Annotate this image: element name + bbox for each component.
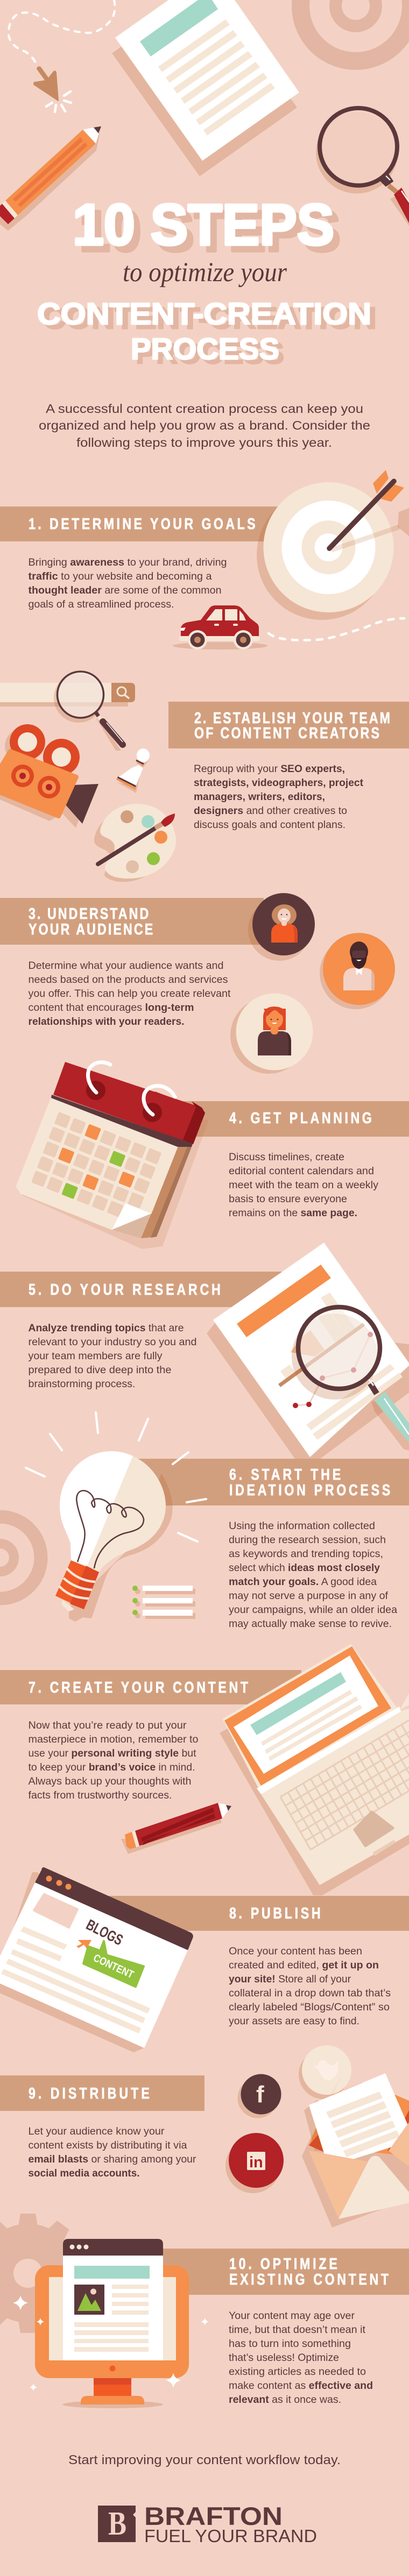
heading band 3: YOUR AUDIENCE (29, 920, 153, 938)
icon: pencil (0, 126, 101, 231)
icon: research document with magnifier (207, 1243, 409, 1459)
icon: film camera (0, 724, 98, 828)
heading band 9 (0, 2075, 204, 2111)
icon: logo mark: B (108, 2506, 126, 2542)
text block 8: your site! Store all of your (229, 1974, 351, 1985)
icon: linkedin badge: in (249, 2154, 263, 2171)
icon: laptop (220, 1644, 409, 1895)
icon: gear (0, 2214, 88, 2333)
icon: facebook badge: f (256, 2081, 264, 2108)
text block 4: Discuss timelines, create (229, 1152, 344, 1163)
text block 7 (28, 1720, 198, 1801)
panel: step 5 (0, 1243, 409, 1459)
text block 2: strategists, videographers, project (194, 777, 364, 789)
text block 4 (229, 1152, 379, 1219)
icon: red pencil (121, 1803, 231, 1854)
text block 3: Determine what your audience wants and (28, 960, 224, 972)
text block 2: designers and other creatives to (194, 805, 347, 817)
text block 1: thought leader are some of the common (28, 585, 222, 596)
icon: linkedin badge (225, 2133, 284, 2193)
icon: audience bearded man (320, 933, 395, 1009)
heading band 7: 7. CREATE YOUR CONTENT (29, 1678, 248, 1696)
text block 3 (28, 960, 231, 1027)
icon: magnifier (54, 672, 123, 751)
text block 6: select which ideas most closely (229, 1562, 380, 1574)
heading band 8 (102, 1896, 409, 1931)
text block 2: managers, writers, editors, (194, 791, 325, 803)
text block 8: your assets are easy to find. (229, 2016, 359, 2027)
text block 6: during the research session, such (229, 1535, 386, 1546)
panel: step 1 (0, 470, 409, 650)
text block 1: traffic to your website and becoming a (28, 571, 212, 582)
tagline: FUEL YOUR BRAND (144, 2526, 317, 2546)
text block 8: Once your content has been (229, 1946, 362, 1957)
text block 6: as keywords and trending topics, (229, 1549, 383, 1560)
text block 7: Always back up your thoughts with (28, 1776, 192, 1787)
heading band 9: 9. DISTRIBUTE (29, 2084, 150, 2102)
icon: dashed cursor trail (9, 0, 115, 63)
heading band 6: IDEATION PROCESS (229, 1481, 390, 1499)
heading: 10 steps: 10 STEPS (73, 192, 334, 257)
text block 3: you offer. This can help you create relevant (28, 988, 231, 1000)
text block 10: relevant as it once was. (229, 2394, 341, 2406)
icon: orange cursor (76, 1940, 91, 1949)
intro text: A successful content creation process can keep you (46, 402, 363, 416)
text block 9: Let your audience know your (28, 2126, 165, 2137)
text block 4: remains on the same page. (229, 1208, 357, 1219)
heading band 7 (0, 1670, 301, 1704)
text block 2 (194, 763, 364, 831)
text block 10: existing articles as needed to (229, 2366, 366, 2378)
intro text (39, 402, 370, 449)
panel: step 8 (0, 1867, 409, 2052)
heading band 1 (0, 506, 280, 541)
heading band 6 (135, 1459, 409, 1505)
heading band 10 (161, 2249, 409, 2295)
text block 4: editorial content calendars and (229, 1166, 374, 1177)
icon: target with arrow (257, 470, 409, 620)
icon: chess pawn (116, 748, 150, 793)
icon: click marks (46, 91, 71, 112)
icon: light rays (26, 1412, 206, 1542)
text block 6: match your goals. A good idea (229, 1576, 377, 1588)
heading band 3: 3. UNDERSTAND (29, 904, 149, 923)
heading band 6: 6. START THE (229, 1465, 341, 1483)
heading band 3 (0, 898, 264, 945)
intro text: following steps to improve yours this year. (76, 436, 332, 449)
icon: search bar (0, 683, 135, 707)
text block 10 (229, 2310, 373, 2406)
panel: step 10 (0, 2214, 409, 2408)
heading band 4: 4. GET PLANNING (229, 1109, 372, 1127)
icon: audience woman with wavy hair (248, 893, 315, 961)
heading band 8: 8. PUBLISH (229, 1904, 321, 1922)
text block 5: brainstorming process. (28, 1379, 136, 1390)
icon: check list (132, 1586, 195, 1619)
icon: desktop monitor (35, 2239, 189, 2408)
icon: content tab: CONTENT (91, 1952, 136, 1981)
text block 1: Bringing awareness to your brand, driving (28, 557, 227, 568)
text block 8: collateral in a drop down tab that’s (229, 1988, 391, 1999)
text block 2: discuss goals and content plans. (194, 819, 345, 831)
text block 9: content exists by distributing it via (28, 2140, 187, 2151)
heading band 5 (0, 1272, 285, 1307)
text block 9 (28, 2126, 196, 2179)
text block 6: may not serve a purpose in any of (229, 1590, 389, 1602)
panel: step 9 (0, 2045, 409, 2228)
icon: light bulb (55, 1451, 173, 1622)
icon: dashed road (269, 618, 404, 640)
text block 1 (28, 557, 227, 610)
icon: envelope with letter (302, 2073, 409, 2228)
text block 6: Using the information collected (229, 1521, 375, 1532)
icon: calendar (16, 1062, 209, 1249)
heading: script subtitle: to optimize your (123, 258, 287, 288)
text block 9: social media accounts. (28, 2168, 140, 2179)
text block 5: your team members are fully (28, 1351, 163, 1362)
label: blogs: BLOGS (83, 1916, 126, 1949)
text block 7: to keep your brand’s voice in mind. (28, 1762, 195, 1773)
text block 3: needs based on the products and services (28, 974, 228, 986)
heading band 2: OF CONTENT CREATORS (194, 724, 379, 742)
icon: audience red-haired woman (230, 994, 313, 1074)
icon: logo mark (98, 2506, 136, 2542)
heading band 5: 5. DO YOUR RESEARCH (29, 1280, 221, 1298)
text block 5: relevant to your industry so you and (28, 1337, 197, 1348)
icon: magnifying glass (316, 108, 409, 226)
header illustration (0, 0, 409, 231)
text block 8: created and edited, get it up on (229, 1960, 379, 1971)
text block 7: Now that you’re ready to put your (28, 1720, 187, 1731)
text block 10: make content as effective and (229, 2380, 373, 2392)
icon: content tab (83, 1941, 144, 1987)
panel: step 7 (0, 1644, 409, 1895)
brand name: BRAFTON (144, 2502, 283, 2530)
icon: twitter badge (299, 2045, 351, 2099)
closing line: Start improving your content workflow today. (68, 2453, 341, 2467)
heading: process: PROCESS (131, 332, 279, 366)
logo: Brafton (98, 2502, 317, 2546)
icon: car (173, 605, 267, 650)
panel: step 6 (0, 1412, 409, 1630)
icon: paint palette (94, 804, 176, 882)
title (37, 192, 371, 366)
text block 7: use your personal writing style but (28, 1748, 196, 1759)
text block 10: that’s useless! Optimize (229, 2352, 339, 2364)
text block 4: basis to ensure everyone (229, 1194, 347, 1205)
heading band 4 (183, 1101, 409, 1137)
text block 2: Regroup with your SEO experts, (194, 763, 345, 775)
panel: step 4 (16, 1062, 409, 1249)
text block 7: masterpiece in motion, remember to (28, 1734, 198, 1745)
text block 5 (28, 1323, 197, 1390)
text block 6: may actually make sense to revive. (229, 1618, 392, 1630)
heading band 2: 2. ESTABLISH YOUR TEAM (194, 709, 390, 727)
icon: sparkles (13, 2295, 209, 2391)
icon: browser window (0, 1867, 193, 2052)
text block 4: meet with the team on a weekly (229, 1180, 379, 1191)
icon: facebook badge (238, 2074, 281, 2118)
text block 9: email blasts or sharing among your (28, 2154, 196, 2165)
text block 6 (229, 1521, 397, 1630)
text block 10: time, but that doesn’t mean it (229, 2324, 366, 2336)
text block 10: Your content may age over (229, 2310, 355, 2322)
text block 8 (229, 1946, 391, 2027)
heading band 2 (168, 702, 409, 748)
icon: background rings (0, 1517, 41, 1599)
text block 3: relationships with your readers. (28, 1016, 184, 1027)
heading band 1: 1. DETERMINE YOUR GOALS (29, 515, 256, 533)
heading band 10: 10. OPTIMIZE (229, 2254, 337, 2273)
text block 10: has to turn into something (229, 2338, 351, 2350)
text block 7: facts from trustworthy sources. (28, 1790, 172, 1801)
icon: cursor arrow (34, 67, 58, 101)
text block 6: your campaigns, while an older idea (229, 1604, 397, 1616)
icon: document (112, 0, 299, 176)
icon: target rings (300, 0, 409, 61)
text block 1: goals of a streamlined process. (28, 599, 174, 610)
text block 8: clearly labeled “Blogs/Content” so (229, 2002, 390, 2013)
intro text: organized and help you grow as a brand. Consider the (39, 418, 370, 432)
heading: content-creation: CONTENT-CREATION (37, 297, 371, 331)
text block 5: Analyze trending topics that are (28, 1323, 184, 1334)
text block 5: prepared to dive deep into the (28, 1365, 171, 1376)
panel: step 3 (0, 893, 395, 1074)
panel: step 2 (0, 672, 409, 882)
text block 3: content that encourages long-term (28, 1002, 194, 1014)
heading band 10: EXISTING CONTENT (229, 2270, 389, 2288)
